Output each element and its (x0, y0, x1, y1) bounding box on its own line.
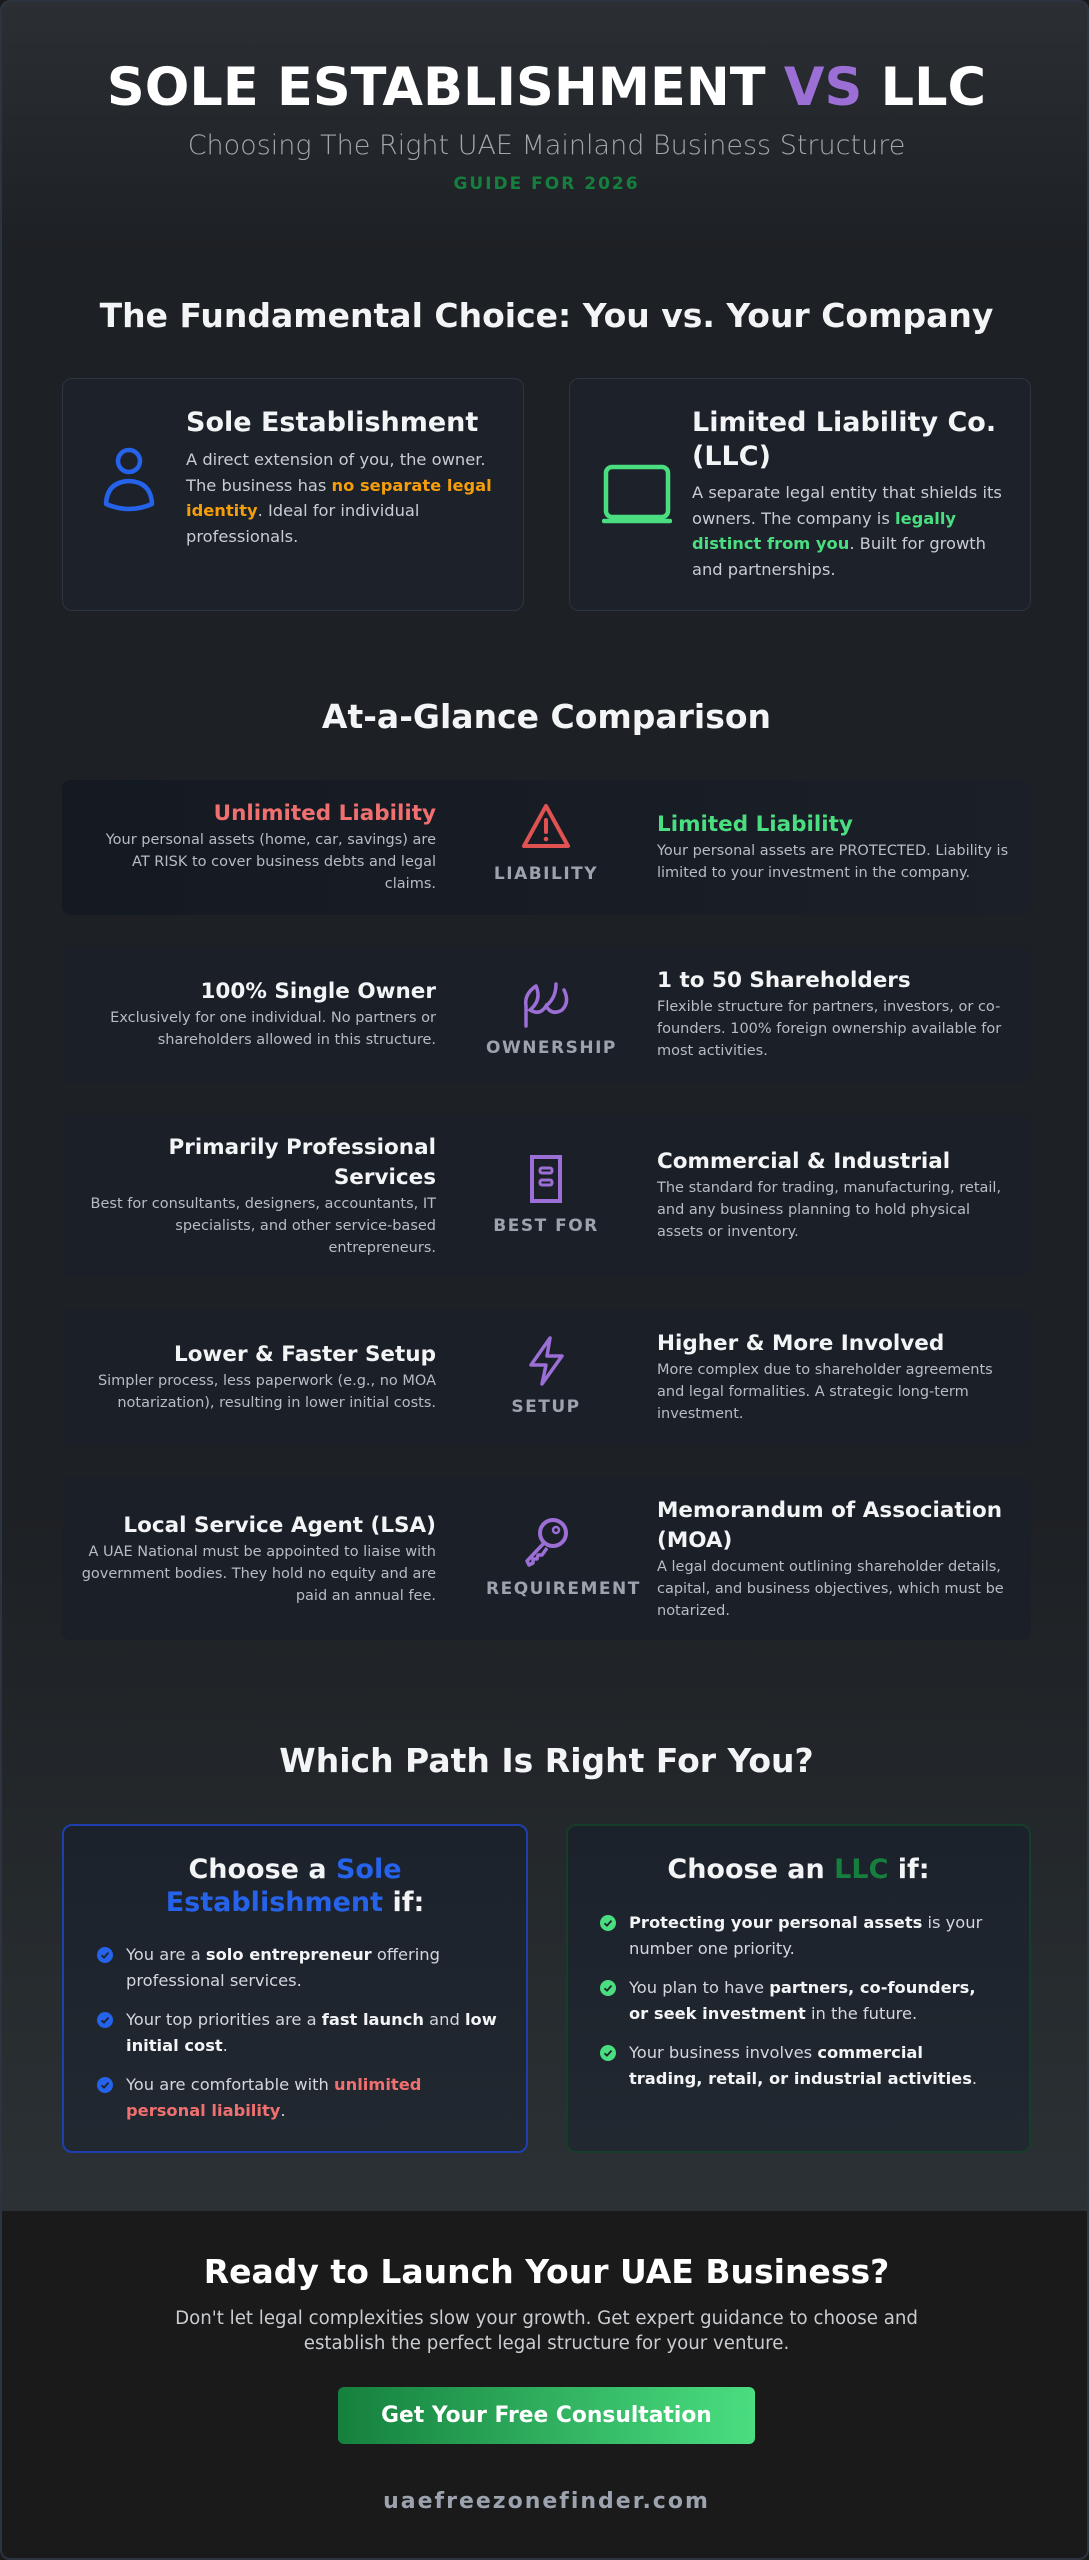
right (657, 1498, 1004, 1619)
row: ownership (62, 946, 1031, 1083)
left: Best for consultants, designers, accountants, IT specialists, and other service-based entrepreneurs. (91, 1196, 436, 1256)
bullet 1 (600, 1913, 982, 1958)
heading: fundamental choice: The Fundamental Choice: You vs. Your Company (100, 296, 993, 335)
button: Get Your Free Consultation (381, 2403, 712, 2428)
row: requirement (62, 1477, 1031, 1640)
right: A legal document outlining shareholder details, capital, and business objectives, which must be notarized. (657, 1559, 1004, 1619)
panel: sole establishment (62, 378, 524, 611)
bullet 2 (600, 1978, 976, 2022)
right: limited liability (657, 812, 1008, 881)
left: Exclusively for one individual. No partners or shareholders allowed in this structure. (110, 1010, 436, 1048)
right: limited liability: Limited Liability (657, 812, 853, 837)
row: best for (62, 1114, 1031, 1277)
left: unlimited liability: Your personal assets (home, car, savings) are AT RISK to cover business debts and legal claims. (106, 832, 436, 892)
left (91, 1135, 436, 1256)
left (110, 979, 436, 1048)
icon: laptop (602, 464, 672, 524)
left (98, 1342, 436, 1411)
title: Choose an LLC if: (667, 1854, 930, 1885)
left: Simpler process, less paperwork (e.g., no MOA notarization), resulting in lower initial costs. (98, 1373, 436, 1411)
icon: cabinet: BEST FOR (493, 1216, 599, 1236)
right (657, 968, 1002, 1059)
left: Local Service Agent (LSA) (123, 1513, 436, 1538)
button (338, 2387, 755, 2444)
panel: choose llc: You plan to have partners, co-founders, or seek investment in the future. (629, 1978, 976, 2022)
panel: choose llc (566, 1824, 1031, 2153)
right: limited liability: Your personal assets are PROTECTED. Liability is limited to your investment in the company. (657, 843, 1008, 881)
panel: choose sole establishment (62, 1824, 528, 2153)
icon: bolt (511, 1336, 581, 1417)
title (166, 1854, 424, 1918)
icon: ownership (486, 982, 617, 1058)
right (657, 1331, 993, 1422)
right: Commercial & Industrial (657, 1149, 950, 1174)
icon: warning: LIABILITY (494, 864, 598, 884)
left: unlimited liability: Unlimited Liability (214, 801, 436, 826)
cta heading: Ready to Launch Your UAE Business? (204, 2252, 889, 2291)
right: The standard for trading, manufacturing, retail, and any business planning to hold physical assets or inventory. (657, 1180, 1001, 1240)
website url: uaefreezonefinder.com (383, 2489, 710, 2514)
panel: choose sole establishment: Your top priorities are a fast launch and low initial cost. (126, 2010, 497, 2054)
bullet 3 (97, 2075, 421, 2120)
icon: ownership: OWNERSHIP (486, 1038, 617, 1058)
right: Memorandum of Association (MOA) (657, 1498, 1002, 1553)
footer cta (2, 2211, 1089, 2560)
icon: key (486, 1518, 641, 1599)
title: Limited Liability Co. (LLC) (692, 407, 996, 472)
icon: warning (494, 804, 598, 884)
panel: choose llc: Protecting your personal assets is your number one priority. (629, 1913, 982, 1958)
title: Establishment if: (166, 1887, 424, 1918)
row: liability (62, 780, 1031, 915)
left: Primarily Professional Services (169, 1135, 436, 1190)
title: SOLE ESTABLISHMENT VS LLC (107, 57, 986, 118)
guide tag: GUIDE FOR 2026 (453, 174, 640, 194)
row: setup (62, 1309, 1031, 1446)
panel: llc (569, 378, 1031, 611)
left (82, 1513, 436, 1604)
right: Flexible structure for partners, investors, or co-founders. 100% foreign ownership available for most activities. (657, 999, 1001, 1059)
right (656, 1149, 1001, 1240)
text: A separate legal entity that shields its owners. The company is legally distinct from you. Built for growth and partnerships. (692, 483, 1002, 578)
right: More complex due to shareholder agreements and legal formalities. A strategic long-term investment. (657, 1362, 993, 1422)
panel: choose llc: Your business involves commercial trading, retail, or industrial activities. (629, 2043, 977, 2088)
panel: choose sole establishment: You are a solo entrepreneur offering professional services. (126, 1945, 440, 1990)
left: Lower & Faster Setup (174, 1342, 436, 1367)
right: 1 to 50 Shareholders (657, 968, 911, 993)
title: Sole Establishment (186, 407, 478, 438)
left: 100% Single Owner (200, 979, 436, 1004)
panel: choose sole establishment: You are comfortable with unlimited personal liability. (126, 2075, 421, 2120)
bullet 1 (97, 1945, 440, 1990)
left: unlimited liability (106, 801, 436, 892)
text: A direct extension of you, the owner. The business has no separate legal identity. Ideal for individual professionals. (186, 450, 492, 546)
icon: cabinet (493, 1155, 599, 1236)
icon: key: REQUIREMENT (486, 1579, 641, 1599)
bullet 3 (600, 2043, 977, 2088)
title: Choose a Sole (188, 1854, 402, 1885)
right: Higher & More Involved (657, 1331, 944, 1356)
icon: person (104, 448, 154, 512)
subtitle: Choosing The Right UAE Mainland Business Structure (188, 130, 905, 161)
cta text: Don't let legal complexities slow your growth. Get expert guidance to choose and establish the perfect legal structure for your venture. (175, 2308, 918, 2354)
left: A UAE National must be appointed to liaise with government bodies. They hold no equity and are paid an annual fee. (82, 1544, 436, 1604)
bullet 2 (97, 2010, 497, 2054)
icon: bolt: SETUP (511, 1397, 581, 1417)
heading: at-a-glance: At-a-Glance Comparison (322, 697, 771, 736)
heading: which path: Which Path Is Right For You? (279, 1741, 814, 1780)
